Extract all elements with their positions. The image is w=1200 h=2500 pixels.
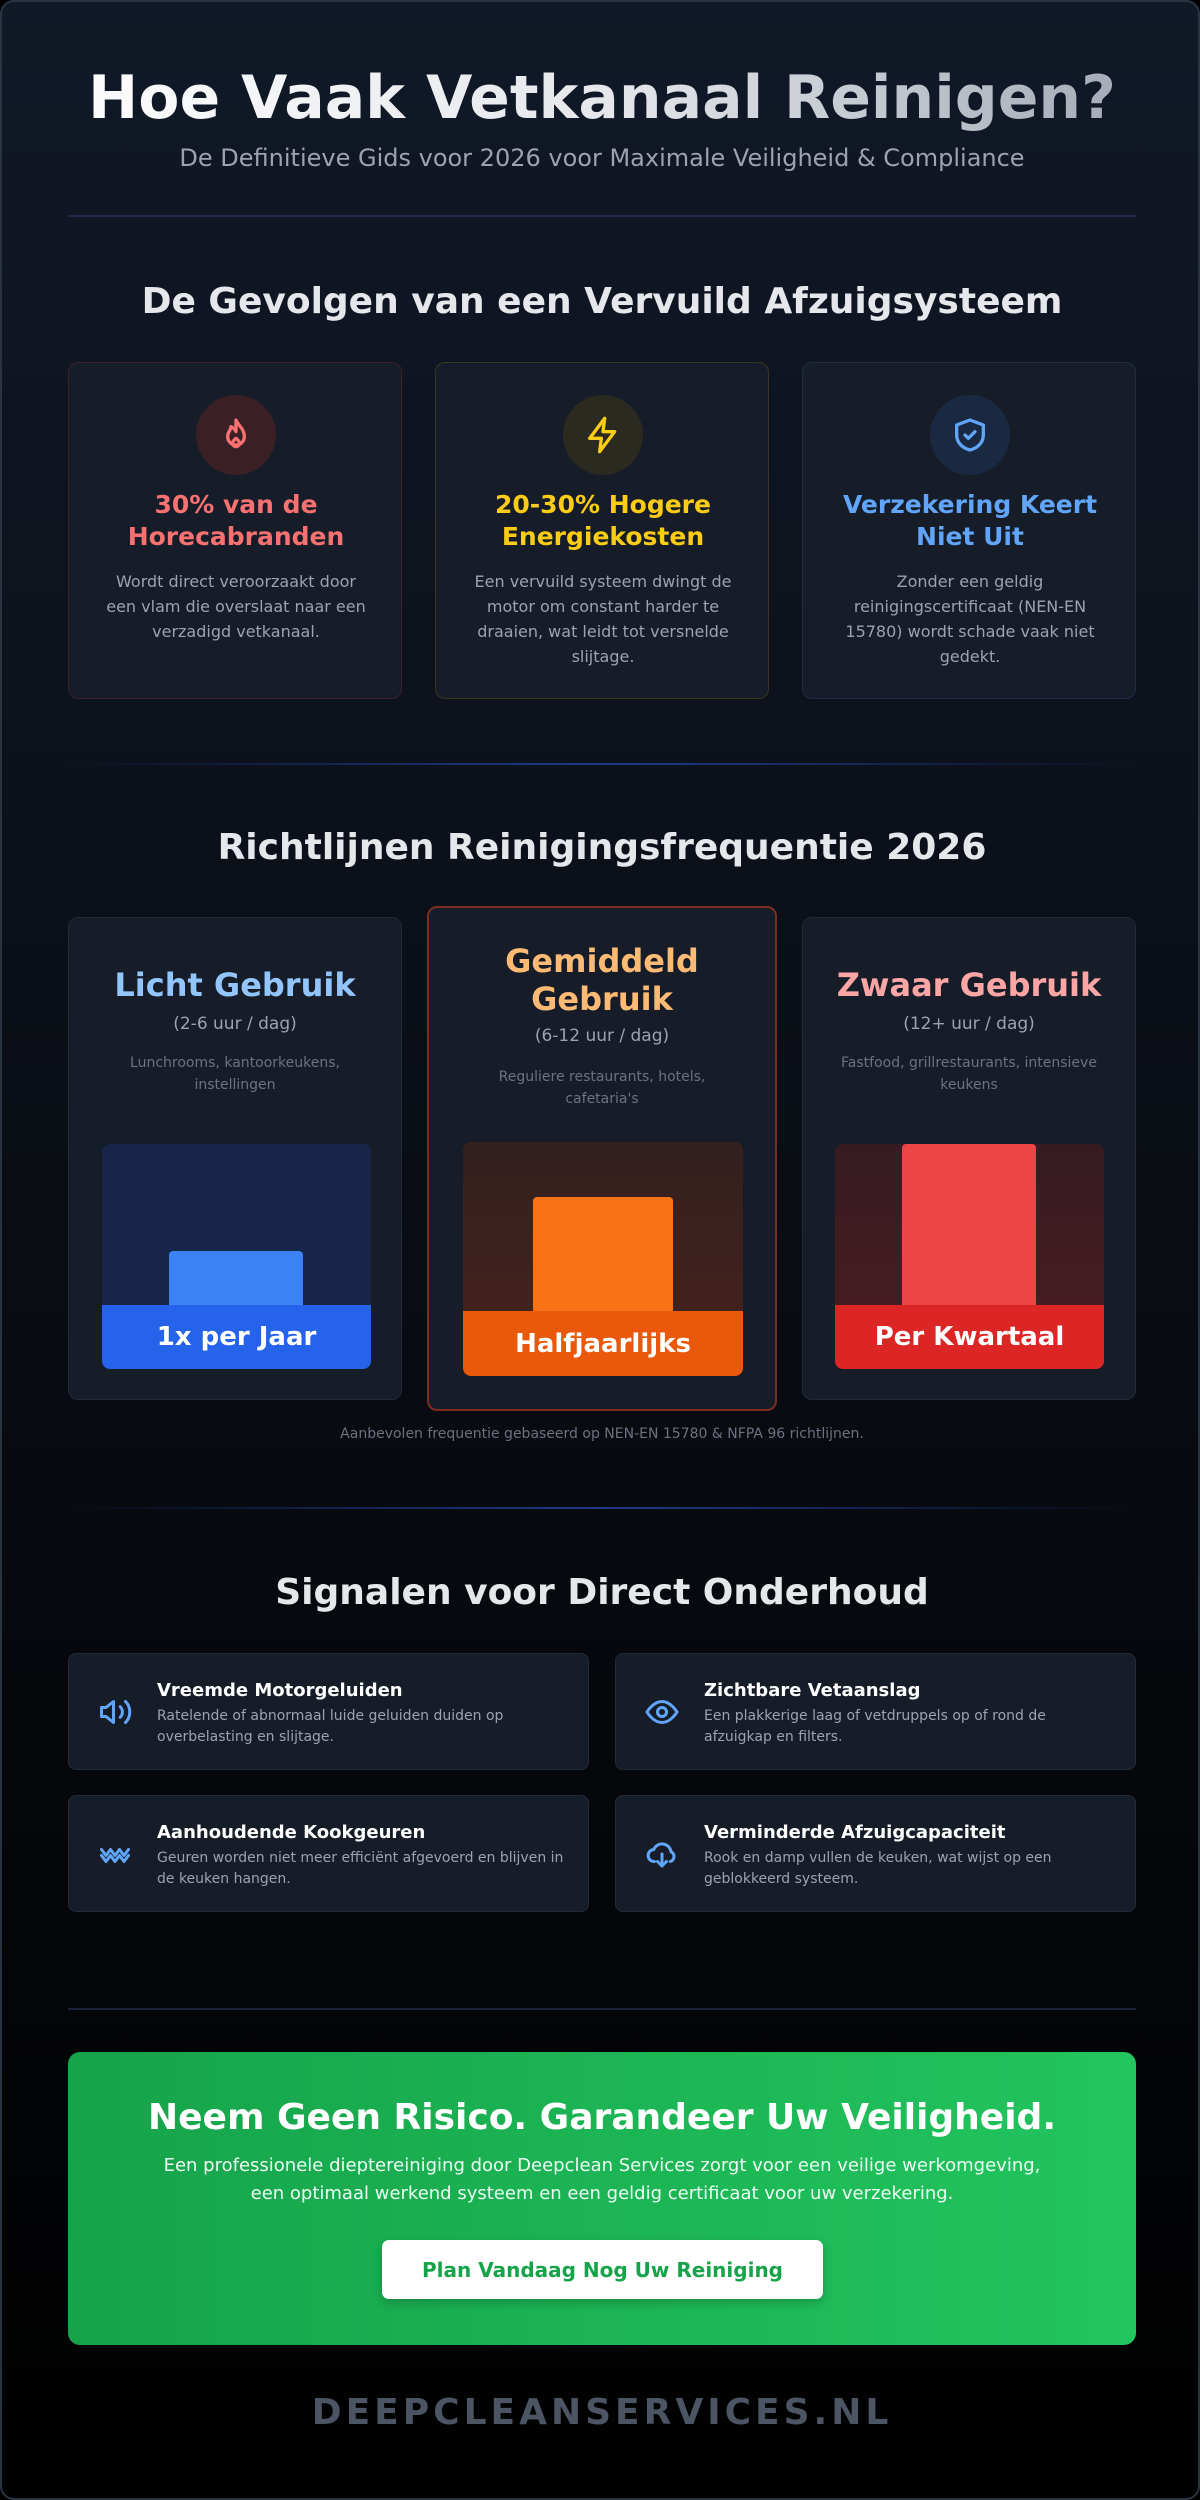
examples: Lunchrooms, kantoorkeukens, instellingen — [130, 1055, 340, 1093]
signal: kookgeuren: Aanhoudende Kookgeuren — [157, 1822, 425, 1843]
panel: zwaar gebruik — [802, 917, 1136, 1400]
card text: Een vervuild systeem dwingt de motor om constant harder te draaien, wat leidt tot versnelde slijtage. — [475, 572, 731, 666]
card title — [843, 490, 1097, 551]
icon: bolt — [563, 395, 643, 475]
signal: kookgeuren: Geuren worden niet meer efficiënt afgevoerd en blijven in de keuken hangen. — [157, 1850, 563, 1887]
panel: energie — [435, 362, 769, 699]
panel: licht gebruik — [68, 917, 402, 1400]
panel: brand — [68, 362, 402, 699]
card title — [128, 490, 344, 551]
footnote: Aanbevolen frequentie gebaseerd op NEN-EN 15780 & NFPA 96 richtlijnen. — [340, 1426, 864, 1442]
bar chart: per kwartaal: Per Kwartaal — [875, 1322, 1064, 1352]
examples: Fastfood, grillrestaurants, intensieve keukens — [841, 1055, 1097, 1093]
tier title: Zwaar Gebruik — [837, 966, 1101, 1004]
card title: 30% van de — [154, 490, 318, 519]
signal: vetaanslag — [615, 1653, 1136, 1770]
panel: verzekering — [802, 362, 1136, 699]
signal: afzuigcapaciteit: Rook en damp vullen de keuken, wat wijst op een geblokkeerd systeem. — [704, 1850, 1052, 1887]
hours: (6-12 uur / dag) — [535, 1026, 669, 1046]
signal: motorgeluiden: Ratelende of abnormaal luide geluiden duiden op overbelasting en slijtage. — [157, 1708, 503, 1745]
tier title: Gebruik — [531, 980, 673, 1018]
bar chart: 1x per jaar — [102, 1144, 371, 1369]
hours: (2-6 uur / dag) — [173, 1014, 297, 1034]
card title: 20-30% Hogere — [495, 490, 711, 519]
cta text — [164, 2155, 1040, 2204]
bar chart: halfjaarlijks: Halfjaarlijks — [515, 1328, 691, 1358]
footer brand: DEEPCLEANSERVICES.NL — [312, 2392, 892, 2433]
examples: Reguliere restaurants, hotels, cafetaria's — [499, 1069, 705, 1107]
icon: cloud download — [646, 1842, 676, 1868]
title: Hoe Vaak Vetkanaal Reinigen? — [88, 63, 1116, 133]
heading: signalen: Signalen voor Direct Onderhoud — [275, 1572, 929, 1613]
icon: speaker — [100, 1700, 132, 1724]
card text: Wordt direct veroorzaakt door een vlam die overslaat naar een verzadigd vetkanaal. — [106, 572, 366, 641]
signal: kookgeuren — [68, 1795, 589, 1912]
signal: motorgeluiden: Vreemde Motorgeluiden — [157, 1680, 403, 1701]
subtitle: De Definitieve Gids voor 2026 voor Maximale Veiligheid & Compliance — [179, 144, 1025, 172]
tier title: Licht Gebruik — [114, 966, 356, 1004]
cta title: Neem Geen Risico. Garandeer Uw Veiligheid. — [148, 2097, 1056, 2138]
cta text: Een professionele dieptereiniging door Deepclean Services zorgt voor een veilige werkomgeving, — [164, 2155, 1040, 2176]
card title: Niet Uit — [916, 522, 1024, 551]
button: Plan Vandaag Nog Uw Reiniging — [422, 2258, 783, 2282]
card title — [495, 490, 711, 551]
hours: (12+ uur / dag) — [903, 1014, 1035, 1034]
panel: gemiddeld gebruik — [427, 906, 777, 1411]
callout: cta — [68, 2052, 1136, 2345]
icon: waves — [100, 1848, 130, 1864]
signal: afzuigcapaciteit: Verminderde Afzuigcapaciteit — [704, 1822, 1005, 1843]
card title: Verzekering Keert — [843, 490, 1097, 519]
cta text: een optimaal werkend systeem en een geldig certificaat voor uw verzekering. — [251, 2183, 953, 2204]
card title: Energiekosten — [502, 522, 704, 551]
bar chart: 1x per jaar: 1x per Jaar — [157, 1322, 316, 1352]
button — [382, 2240, 823, 2299]
icon: shield — [930, 395, 1010, 475]
bar chart: halfjaarlijks — [463, 1142, 743, 1376]
icon: flame — [196, 395, 276, 475]
signal: vetaanslag: Zichtbare Vetaanslag — [704, 1680, 920, 1701]
heading: gevolgen: De Gevolgen van een Vervuild Afzuigsysteem — [142, 281, 1062, 322]
heading: richtlijnen: Richtlijnen Reinigingsfrequentie 2026 — [218, 827, 986, 868]
icon: eye — [645, 1700, 679, 1724]
card text: Zonder een geldig reinigingscertificaat (NEN-EN 15780) wordt schade vaak niet gedekt. — [845, 572, 1095, 666]
signal: motorgeluiden — [68, 1653, 589, 1770]
bar chart: per kwartaal — [835, 1144, 1104, 1369]
tier title — [505, 942, 699, 1018]
signal: vetaanslag: Een plakkerige laag of vetdruppels op of rond de afzuigkap en filters. — [704, 1708, 1046, 1745]
tier title: Gemiddeld — [505, 942, 699, 980]
signal: afzuigcapaciteit — [615, 1795, 1136, 1912]
card title: Horecabranden — [128, 522, 344, 551]
